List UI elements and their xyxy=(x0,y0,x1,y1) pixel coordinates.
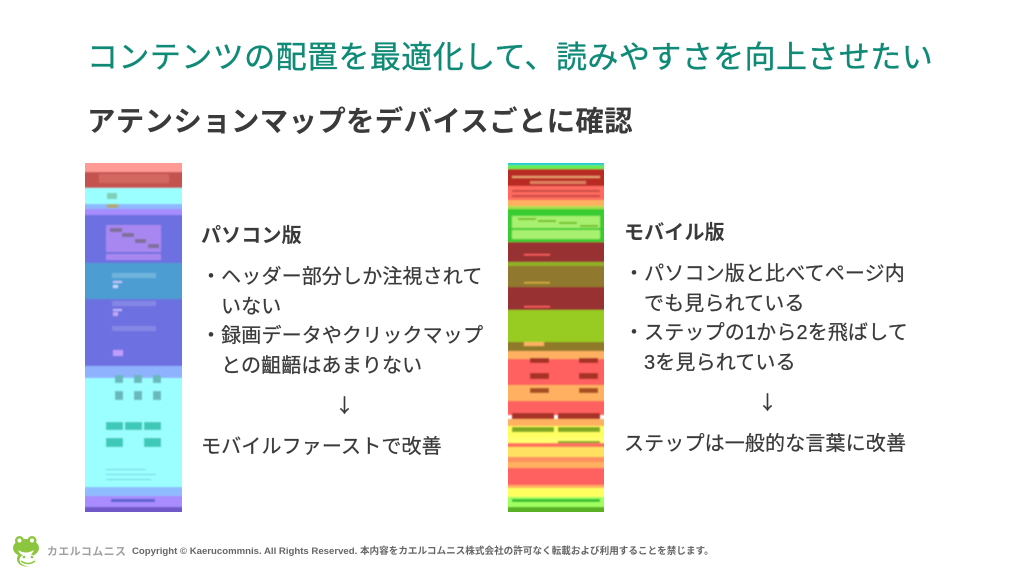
arrow: mobile: ↓ xyxy=(758,388,777,415)
bullet list: desktop xyxy=(201,266,483,377)
title: コンテンツの配置を最適化して、読みやすさを向上させたい xyxy=(87,40,933,75)
bullet list: mobile: ・ステップの1から2を飛ばして xyxy=(624,322,908,344)
conclusion: mobile: ステップは一般的な言葉に改善 xyxy=(624,433,906,455)
heatmap: desktop xyxy=(85,163,182,512)
bullet list: mobile xyxy=(624,262,908,374)
heatmap: mobile xyxy=(508,163,604,512)
bullet list: desktop: との齟齬はあまりない xyxy=(221,355,422,377)
heading: desktop: パソコン版 xyxy=(201,225,302,247)
heading: mobile: モバイル版 xyxy=(624,222,725,244)
bullet list: desktop: ・録画データやクリックマップ xyxy=(201,325,483,347)
bullet list: mobile: ・パソコン版と比べてページ内 xyxy=(624,263,905,285)
bullet list: mobile: 3を見られている xyxy=(644,352,796,374)
bullet list: desktop: ・ヘッダー部分しか注視されて xyxy=(201,266,482,288)
panel: desktop notes xyxy=(201,224,483,458)
subtitle: アテンションマップをデバイスごとに確認 xyxy=(87,106,633,138)
copyright: Copyright © Kaerucommnis. All Rights Reserved. 本内容をカエルコムニス株式会社の許可なく転載および利用することを禁じます。 xyxy=(132,546,714,556)
footer xyxy=(13,536,714,566)
arrow: desktop: ↓ xyxy=(335,391,354,418)
icon: frog logo xyxy=(13,536,39,566)
conclusion: desktop: モバイルファーストで改善 xyxy=(201,436,442,458)
bullet list: mobile: でも見られている xyxy=(644,293,805,315)
bullet list: desktop: いない xyxy=(221,296,281,318)
logotype: カエルコムニス xyxy=(47,546,127,558)
panel: mobile notes xyxy=(624,222,908,455)
